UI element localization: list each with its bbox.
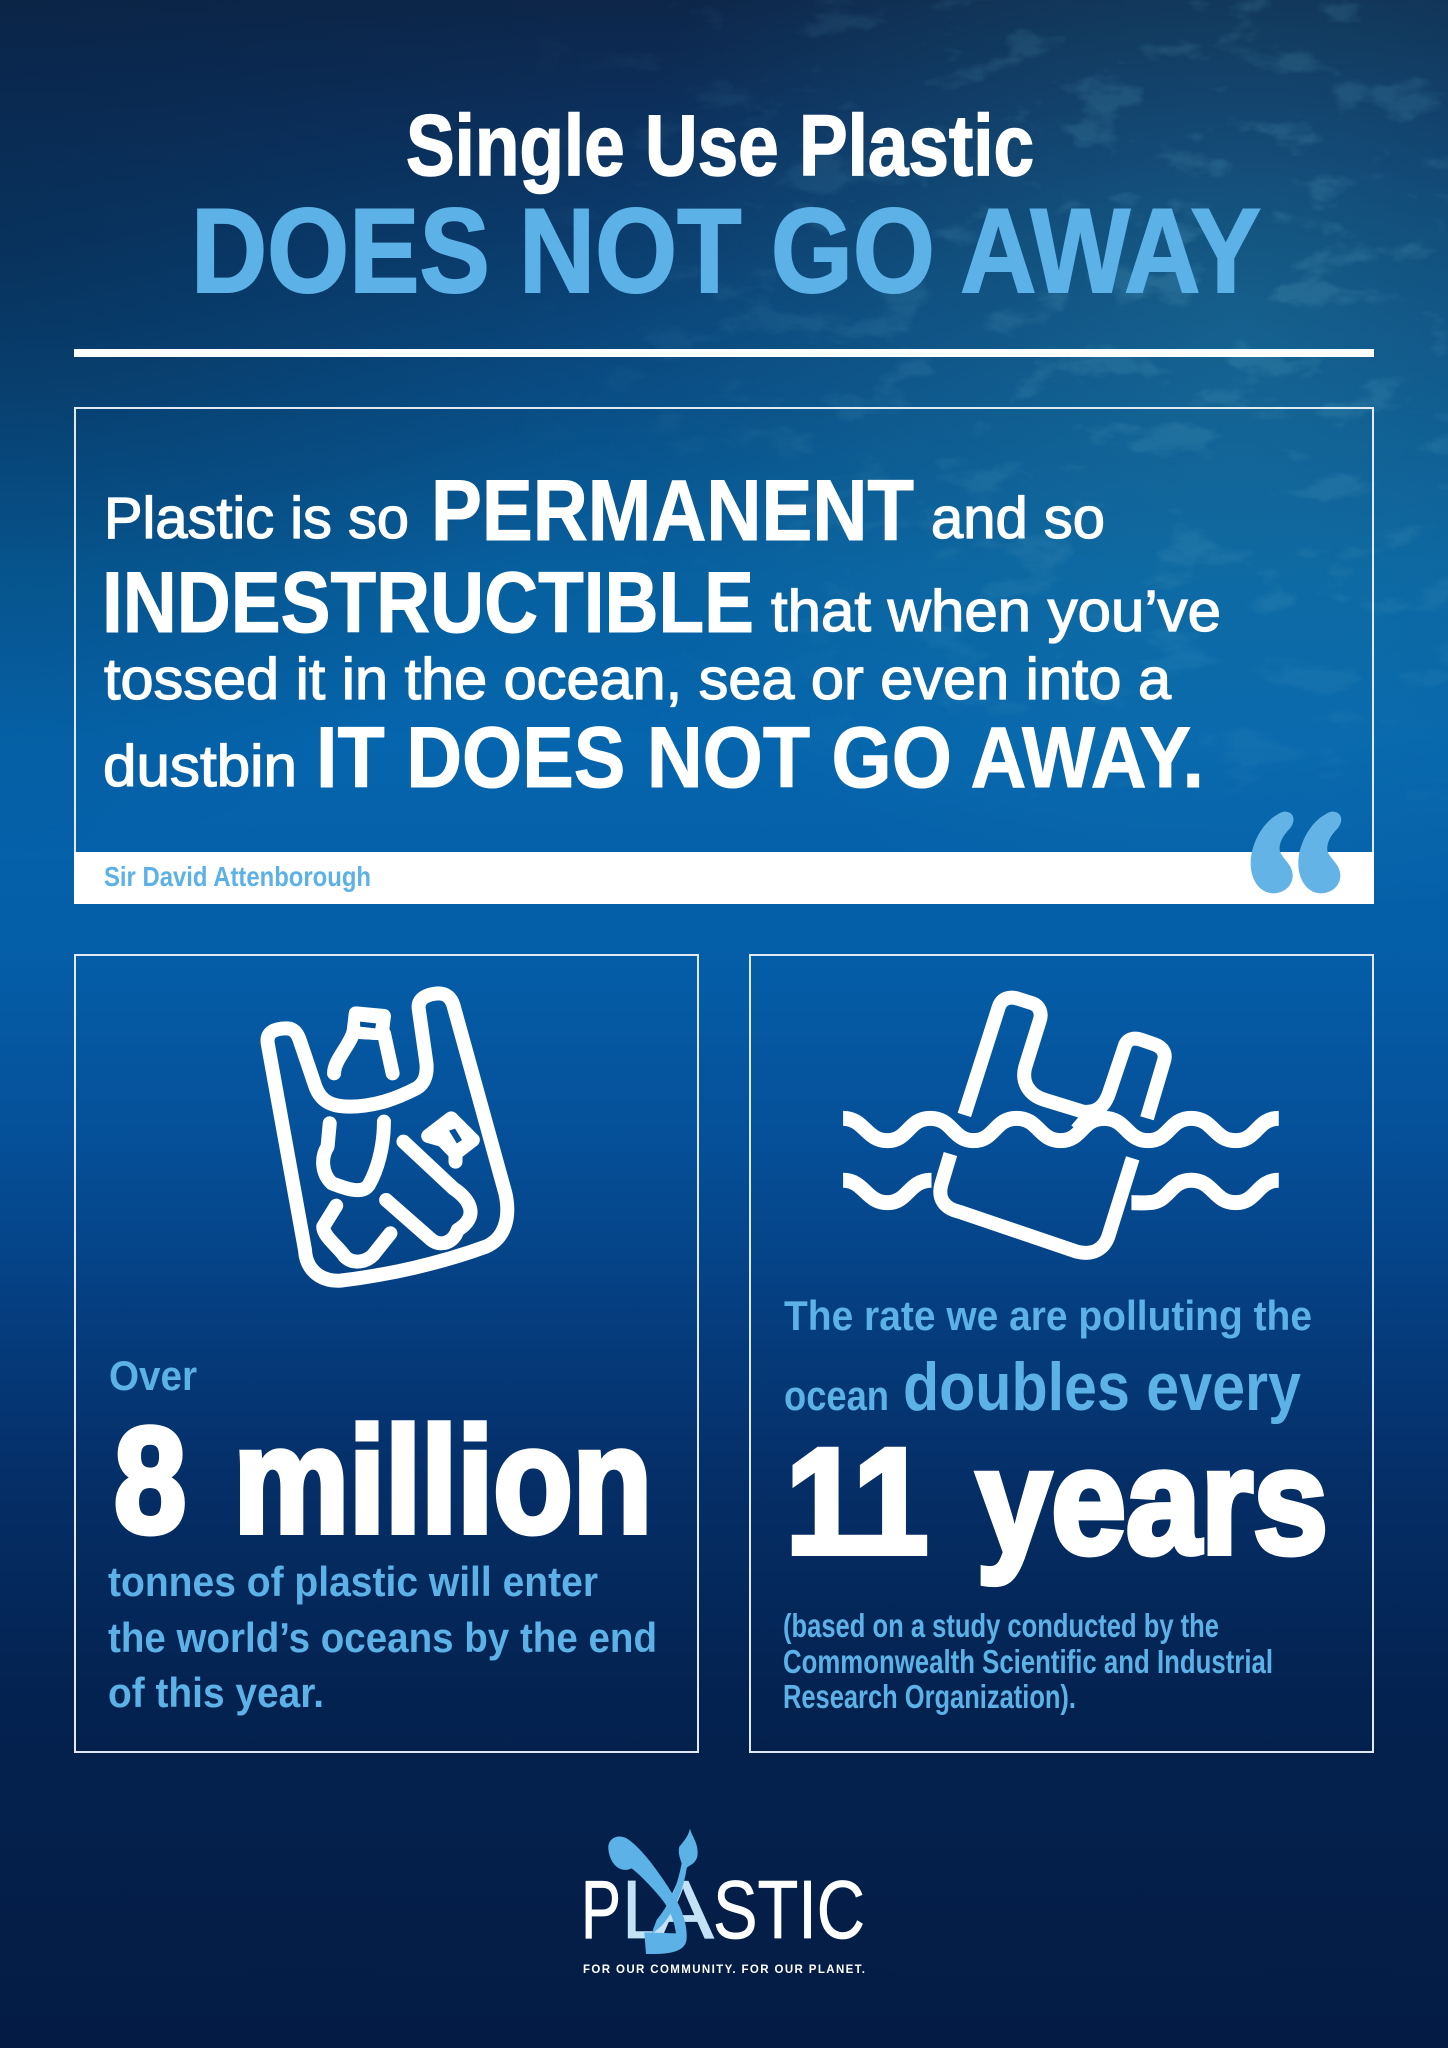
icon: quotation marks	[1251, 812, 1341, 893]
quote text: dustbin	[103, 734, 297, 799]
stat text: 11 years	[786, 1417, 1328, 1585]
stat text: Research Organization).	[783, 1678, 1076, 1715]
stat text: Over	[109, 1352, 197, 1399]
logo wordmark	[581, 1863, 865, 1956]
panel: quote	[74, 408, 1374, 904]
quote frame	[75, 408, 1373, 903]
quote text: tossed it in the ocean, sea or even into a	[104, 647, 1172, 712]
stat text	[108, 1352, 657, 1716]
panel: 11 years	[750, 955, 1373, 1752]
attribution strip	[74, 852, 1374, 904]
quote text: Plastic is so	[104, 486, 409, 551]
quote text: INDESTRUCTIBLE	[102, 555, 754, 651]
title line: Single Use Plastic: Single Use Plastic	[406, 98, 1034, 194]
icon: plastic bag with bottles	[268, 993, 507, 1281]
quote text	[102, 463, 1221, 806]
stat text: (based on a study conducted by the	[783, 1607, 1219, 1644]
panel: 8 million tonnes	[75, 955, 698, 1752]
panel frame	[750, 955, 1373, 1752]
stat text: doubles every	[903, 1349, 1301, 1425]
stat text: ocean	[784, 1372, 889, 1419]
logo wordmark: L	[622, 1863, 664, 1956]
stat text: of this year.	[108, 1669, 324, 1716]
title line: DOES NOT GO AWAY: DOES NOT GO AWAY	[191, 184, 1261, 318]
attribution: Sir David Attenborough	[104, 861, 371, 892]
stat text: The rate we are polluting the	[784, 1292, 1312, 1339]
title divider	[74, 349, 1374, 357]
stat text: 8 million	[114, 1396, 652, 1564]
quote text: that when you’ve	[771, 579, 1221, 644]
quote text: PERMANENT	[431, 463, 914, 559]
logo wordmark: STIC	[713, 1863, 865, 1956]
quote text: and so	[931, 486, 1105, 551]
stat text: tonnes of plastic will enter	[108, 1558, 598, 1605]
title	[191, 98, 1261, 318]
logo wordmark: P	[581, 1863, 621, 1956]
logo	[581, 1828, 865, 1976]
logo figure	[608, 1828, 698, 1954]
quote text: IT DOES NOT GO AWAY.	[316, 710, 1204, 806]
logo wordmark: A	[652, 1863, 715, 1956]
panel frame	[75, 955, 698, 1752]
icon: bag sinking in waves	[843, 998, 1279, 1253]
logo tagline: FOR OUR COMMUNITY. FOR OUR PLANET.	[583, 1964, 865, 1976]
stat text: Commonwealth Scientific and Industrial	[783, 1643, 1273, 1680]
stat text: the world’s oceans by the end	[108, 1614, 657, 1661]
stat text	[783, 1292, 1328, 1715]
